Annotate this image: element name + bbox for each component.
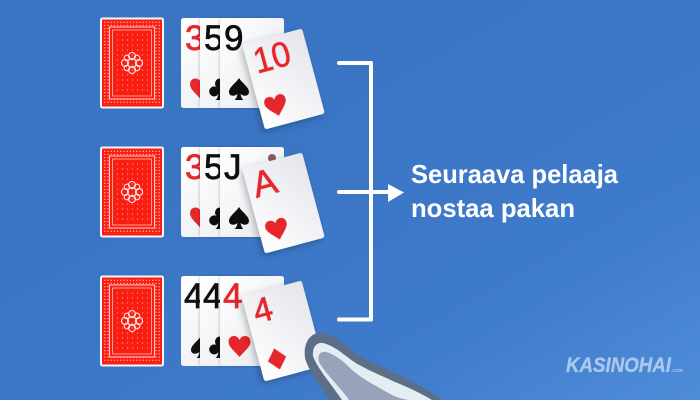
card back 2 xyxy=(100,146,164,238)
icon: thumb holding card xyxy=(305,333,443,400)
hand card: 5 of clubs: 5 xyxy=(204,19,223,58)
text: next player draws the deck: nostaa pakan xyxy=(411,193,575,223)
hand card: 4 of clubs: 4 xyxy=(203,277,222,316)
hand card: 4 of clubs xyxy=(200,276,265,366)
hand card: 3 of hearts: 3 xyxy=(185,19,204,58)
hand card: 4 of hearts: 4 xyxy=(223,277,242,316)
hand card: 3 of hearts: 3 xyxy=(185,148,204,187)
hand card: 4 of spades: 4 xyxy=(184,277,203,316)
logo: Kasinohai: .com xyxy=(671,368,684,374)
hand card: 5 of clubs xyxy=(200,147,265,237)
tilted card: 10 of hearts xyxy=(242,28,325,130)
row 2: cards xyxy=(100,146,325,254)
tilted card: 10 of hearts: 10 xyxy=(249,34,295,81)
tilted card: ace of hearts: A xyxy=(248,160,282,206)
hand card: 3 of hearts xyxy=(181,18,246,108)
hand card: 4 of hearts xyxy=(220,276,284,366)
text: next player draws the deck xyxy=(411,159,619,223)
hand card: jack of spades: J xyxy=(224,148,242,187)
tilted card: 4 of diamonds: 4 xyxy=(249,290,277,331)
hand card: 9 of spades xyxy=(220,18,284,108)
tilted card: ace of hearts xyxy=(242,152,325,254)
hand card: 4 of spades xyxy=(181,276,246,366)
row 3: cards xyxy=(100,276,324,382)
card back 3 xyxy=(100,276,164,366)
tilted card: 4 of diamonds xyxy=(242,280,324,382)
row 1: cards xyxy=(100,18,325,130)
hand card: 9 of spades: 9 xyxy=(224,19,243,58)
bracket with arrow xyxy=(339,63,404,320)
text: next player draws the deck: Seuraava pelaaja xyxy=(411,159,619,189)
hand card: 5 of clubs xyxy=(200,18,265,108)
card back 1 xyxy=(100,18,164,108)
hand card: 3 of hearts xyxy=(181,147,246,237)
hand card: 5 of clubs: 5 xyxy=(204,148,223,187)
logo: Kasinohai: KASINOHAI xyxy=(566,354,672,377)
hand card: jack of spades xyxy=(220,147,284,237)
